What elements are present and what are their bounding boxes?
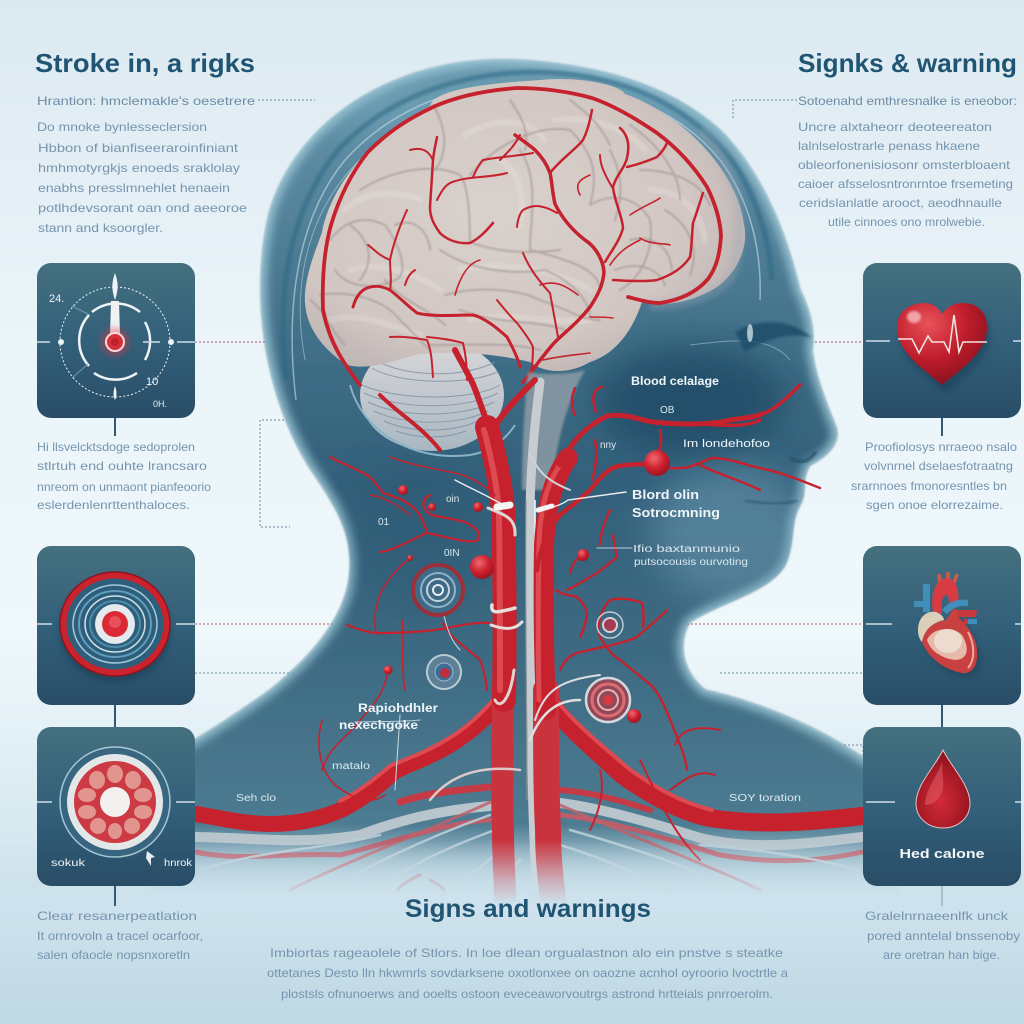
card: clock: 0H. [153,399,167,409]
central labels: 01 [378,517,390,528]
card: vessel disc: hnrok [164,858,193,869]
central labels: Seh clo [236,793,277,804]
connectors [115,418,942,906]
left text 3: It ornrovoln a tracel ocarfoor, [37,929,203,943]
left text 2: stlrtuh end ouhte lrancsaro [37,459,207,473]
right intro text: Sotoenahd emthresnalke is eneobor: [798,94,1017,108]
red balls [384,450,670,723]
white nerves and arrows [355,455,632,800]
central labels: Blood celalage [631,374,719,388]
dotted leader lines [195,100,863,760]
right text 2 [851,440,1017,512]
left text 3: salen ofaocle nopsnxoretln [37,948,190,962]
brain folds [310,100,710,350]
right text 3: Gralelnrnaeenlfk unck [865,909,1009,923]
central labels: Ifio baxtanmunio [633,544,741,555]
right text 3: are oretran han bige. [883,948,1000,962]
title: left: Stroke in, a rigks [35,48,255,78]
left intro text: enabhs presslmnehlet henaein [38,181,230,195]
central labels: SOY toration [729,793,801,804]
card: anatomical heart [863,546,1021,705]
right intro text: Uncre alxtaheorr deoteereaton [798,120,992,134]
right text 3 [865,909,1020,962]
card: artery cross-section [37,546,195,705]
right intro text: ceridslanlatle arooct, aeodhnaulle [799,196,1002,210]
heart drawing [914,572,981,677]
central labels: Rapiohdhler [358,701,438,715]
face details [735,322,816,504]
left text 2: Hi llsvelcktsdoge sedoprolen [37,440,195,454]
left text 2 [37,440,211,512]
card: clock: 10 [146,376,158,388]
central labels: matalo [332,761,371,772]
right intro text: utile cinnoes ono mrolwebie. [828,215,985,229]
skull rings [283,72,790,400]
head silhouette [192,58,866,881]
bottom fade [0,840,1024,915]
right text 2: Proofiolosys nrraeoo nsalo [865,440,1017,454]
left text 2: eslerdenlenrttenthaloces. [37,498,190,512]
neck arteries [380,350,568,710]
title: bottom: Signs and warnings [405,895,651,923]
left intro text: Hbbon of bianfiseeraroinfiniant [38,141,239,155]
left text 2: nnreom on unmaont pianfeoorio [37,480,211,494]
card: clock [37,263,195,418]
central labels: nexechgoke [339,718,418,732]
bottom description: plostsls ofnunoerws and ooelts ostoon eveceaworvoutrgs astrond hrtteials pnrroerolm. [281,987,773,1001]
right text 2: srarnnoes fmonoresntles bn [851,479,1007,493]
bottom description [267,946,788,1001]
target circles [413,565,630,722]
brain [305,79,745,385]
left intro text: stann and ksoorgler. [38,221,163,235]
card: heart with ECG [863,263,1021,418]
right text 3: pored anntelal bnssenoby [867,929,1020,943]
central labels: Sotrocmning [632,505,720,520]
left intro text: Hrantion: hmclemakle's oesetrere [37,94,255,108]
title: right: Signks & warning [798,48,1017,78]
card: blood drop: Hed calone [900,846,984,861]
card: blood drop [863,727,1021,886]
brain stem and nerve [522,370,585,900]
right intro text [798,94,1017,229]
right intro text: obleorfonenisiosonr omsterbloaent [798,158,1011,172]
central labels: Blord olin [632,487,699,502]
left intro text: hmhmotyrgkjs enoeds sraklolay [38,161,240,175]
central labels: nny [600,440,616,451]
right text 2: volvnrnel dselaesfotraatng [864,459,1013,473]
left intro text [37,94,255,235]
right text 2: sgen onoe elorrezaime. [866,498,1003,512]
card: vessel disc: sokuk [51,858,86,869]
central labels: oin [446,494,459,505]
right intro text: caioer afsselosntronrntoe frsemeting [798,177,1013,191]
left text 3: Clear resanerpeatlation [37,909,197,923]
lower body vessels [196,690,862,900]
left intro text: potlhdevsorant oan ond aeeoroe [38,201,247,215]
card: vessel disc [37,727,195,886]
central labels: Im londehofoo [683,438,770,450]
central labels [236,374,801,804]
left intro text: Do mnoke bynlesseclersion [37,120,207,134]
bottom description: Imbiortas rageaolele of Stlors. In loe dlean orgualastnon alo ein pnstve s steatke [270,946,783,960]
central labels: OB [660,405,675,416]
right intro text: lalnlselostrarle penass hkaene [798,139,980,153]
central labels: putsocousis ourvoting [634,557,748,568]
card: clock: 24. [49,293,64,305]
cerebellum [350,339,515,456]
left text 3 [37,909,203,962]
central labels: 0IN [444,548,460,559]
brain arteries [323,88,721,385]
bottom description: ottetanes Desto lln hkwmrls sovdarksene oxotlonxee on oaozne acnhol oyroorio lvoctrtle a [267,966,788,980]
branch vessels [319,385,820,860]
